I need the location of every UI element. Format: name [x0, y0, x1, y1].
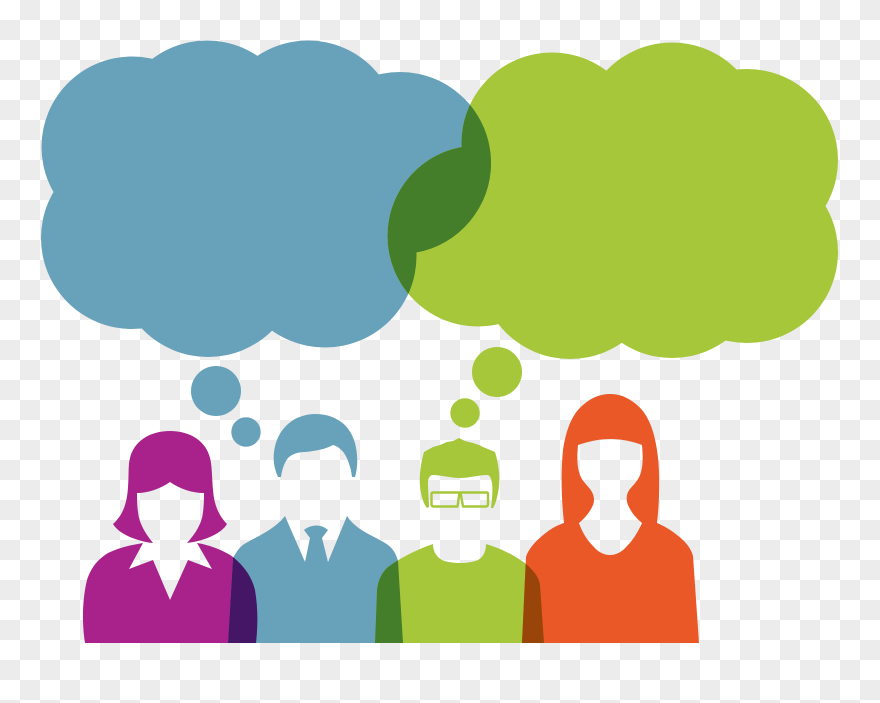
blue thought cloud	[41, 40, 491, 357]
overlap: woman and man	[228, 557, 258, 643]
overlap: blue and green men	[375, 560, 403, 643]
woman hair	[113, 431, 227, 543]
glasses man body	[375, 544, 544, 643]
green thought cloud	[388, 42, 838, 359]
woman body	[83, 543, 257, 643]
person: woman in purple	[113, 431, 227, 543]
person: hooded figure in orange	[522, 394, 699, 643]
cloud overlap: dark green	[388, 104, 491, 294]
green thought bubbles	[450, 347, 522, 428]
man hair	[274, 414, 357, 477]
blue thought bubbles	[191, 366, 261, 447]
man suit body	[228, 516, 403, 643]
overlap: green man and orange figure	[522, 564, 544, 643]
glasses	[432, 492, 488, 506]
person: man in blue suit	[274, 414, 357, 477]
glasses man hair	[420, 438, 499, 508]
person: man with glasses	[420, 438, 499, 508]
